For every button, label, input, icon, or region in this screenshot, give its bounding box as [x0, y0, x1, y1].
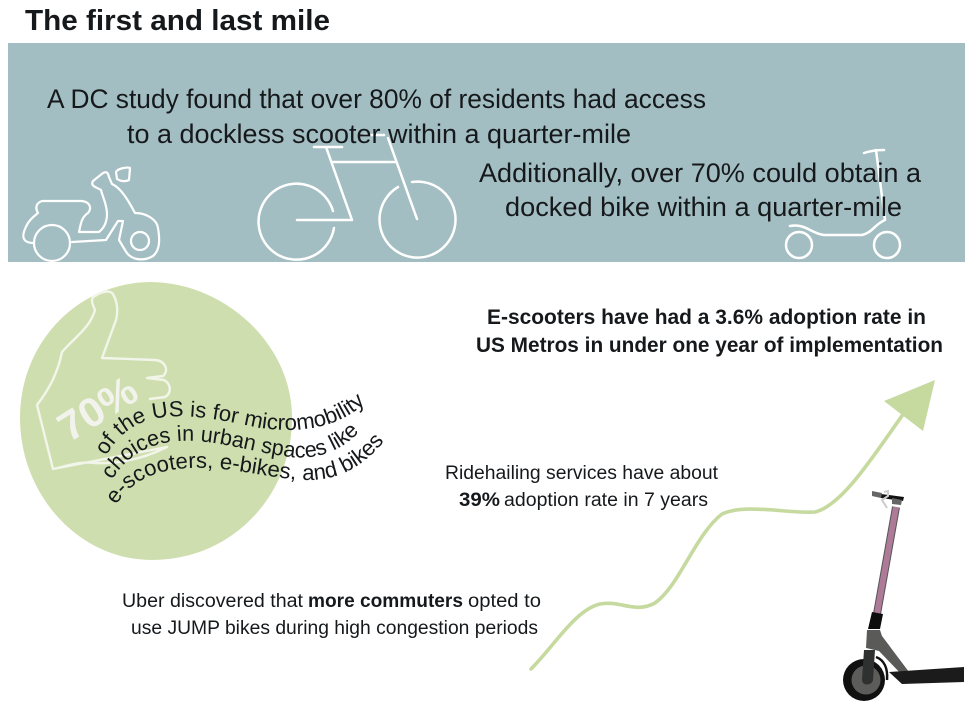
text: Uber JUMP finding: use JUMP bikes during high congestion periods	[131, 618, 538, 639]
text: e-scooter adoption: US Metros in under one year of implementation	[476, 334, 943, 357]
title: The first and last mile	[25, 5, 330, 37]
icon: bicycle	[259, 135, 456, 260]
text: e-scooter adoption	[476, 306, 943, 357]
text: docked bike access: docked bike within a quarter-mile	[505, 192, 902, 222]
wavy caption: e-scooters, e-bikes, and bikes	[108, 435, 382, 502]
icon: moped	[23, 168, 159, 261]
text: e-scooter adoption: E-scooters have had a 3.6% adoption rate in	[487, 306, 926, 329]
text: Uber JUMP finding: opted to	[468, 591, 541, 612]
text: Uber JUMP finding: Uber discovered that	[122, 591, 304, 612]
wavy caption: choices in urban spaces like	[104, 425, 358, 478]
arrow: rising adoption curve	[531, 380, 935, 669]
text: DC scooter study	[47, 84, 706, 149]
icon: electric scooter	[843, 491, 964, 701]
panel: access banner	[8, 43, 965, 262]
text: DC scooter study: A DC study found that over 80% of residents had access	[47, 84, 706, 114]
text: docked bike access: Additionally, over 70% could obtain a	[479, 158, 922, 188]
text: DC scooter study: to a dockless scooter within a quarter-mile	[127, 119, 631, 149]
text: ridehailing adoption	[445, 463, 719, 511]
icon: thumbs up	[37, 292, 170, 469]
text: ridehailing adoption: adoption rate in 7 years	[504, 490, 708, 511]
wavy caption	[98, 394, 382, 502]
wavy caption: of the US is for micromobility	[98, 394, 363, 454]
green paint blob	[20, 282, 292, 560]
text: Uber JUMP finding	[122, 591, 541, 639]
text: Uber JUMP finding: more commuters	[308, 591, 463, 612]
text: docked bike access	[479, 158, 922, 222]
icon: kick scooter	[786, 150, 900, 258]
text: ridehailing adoption: Ridehailing services have about	[445, 463, 719, 484]
panel: 70 percent badge	[20, 282, 382, 560]
stat: 70 percent: 70%	[49, 367, 146, 451]
text: ridehailing adoption: 39%	[459, 490, 500, 511]
